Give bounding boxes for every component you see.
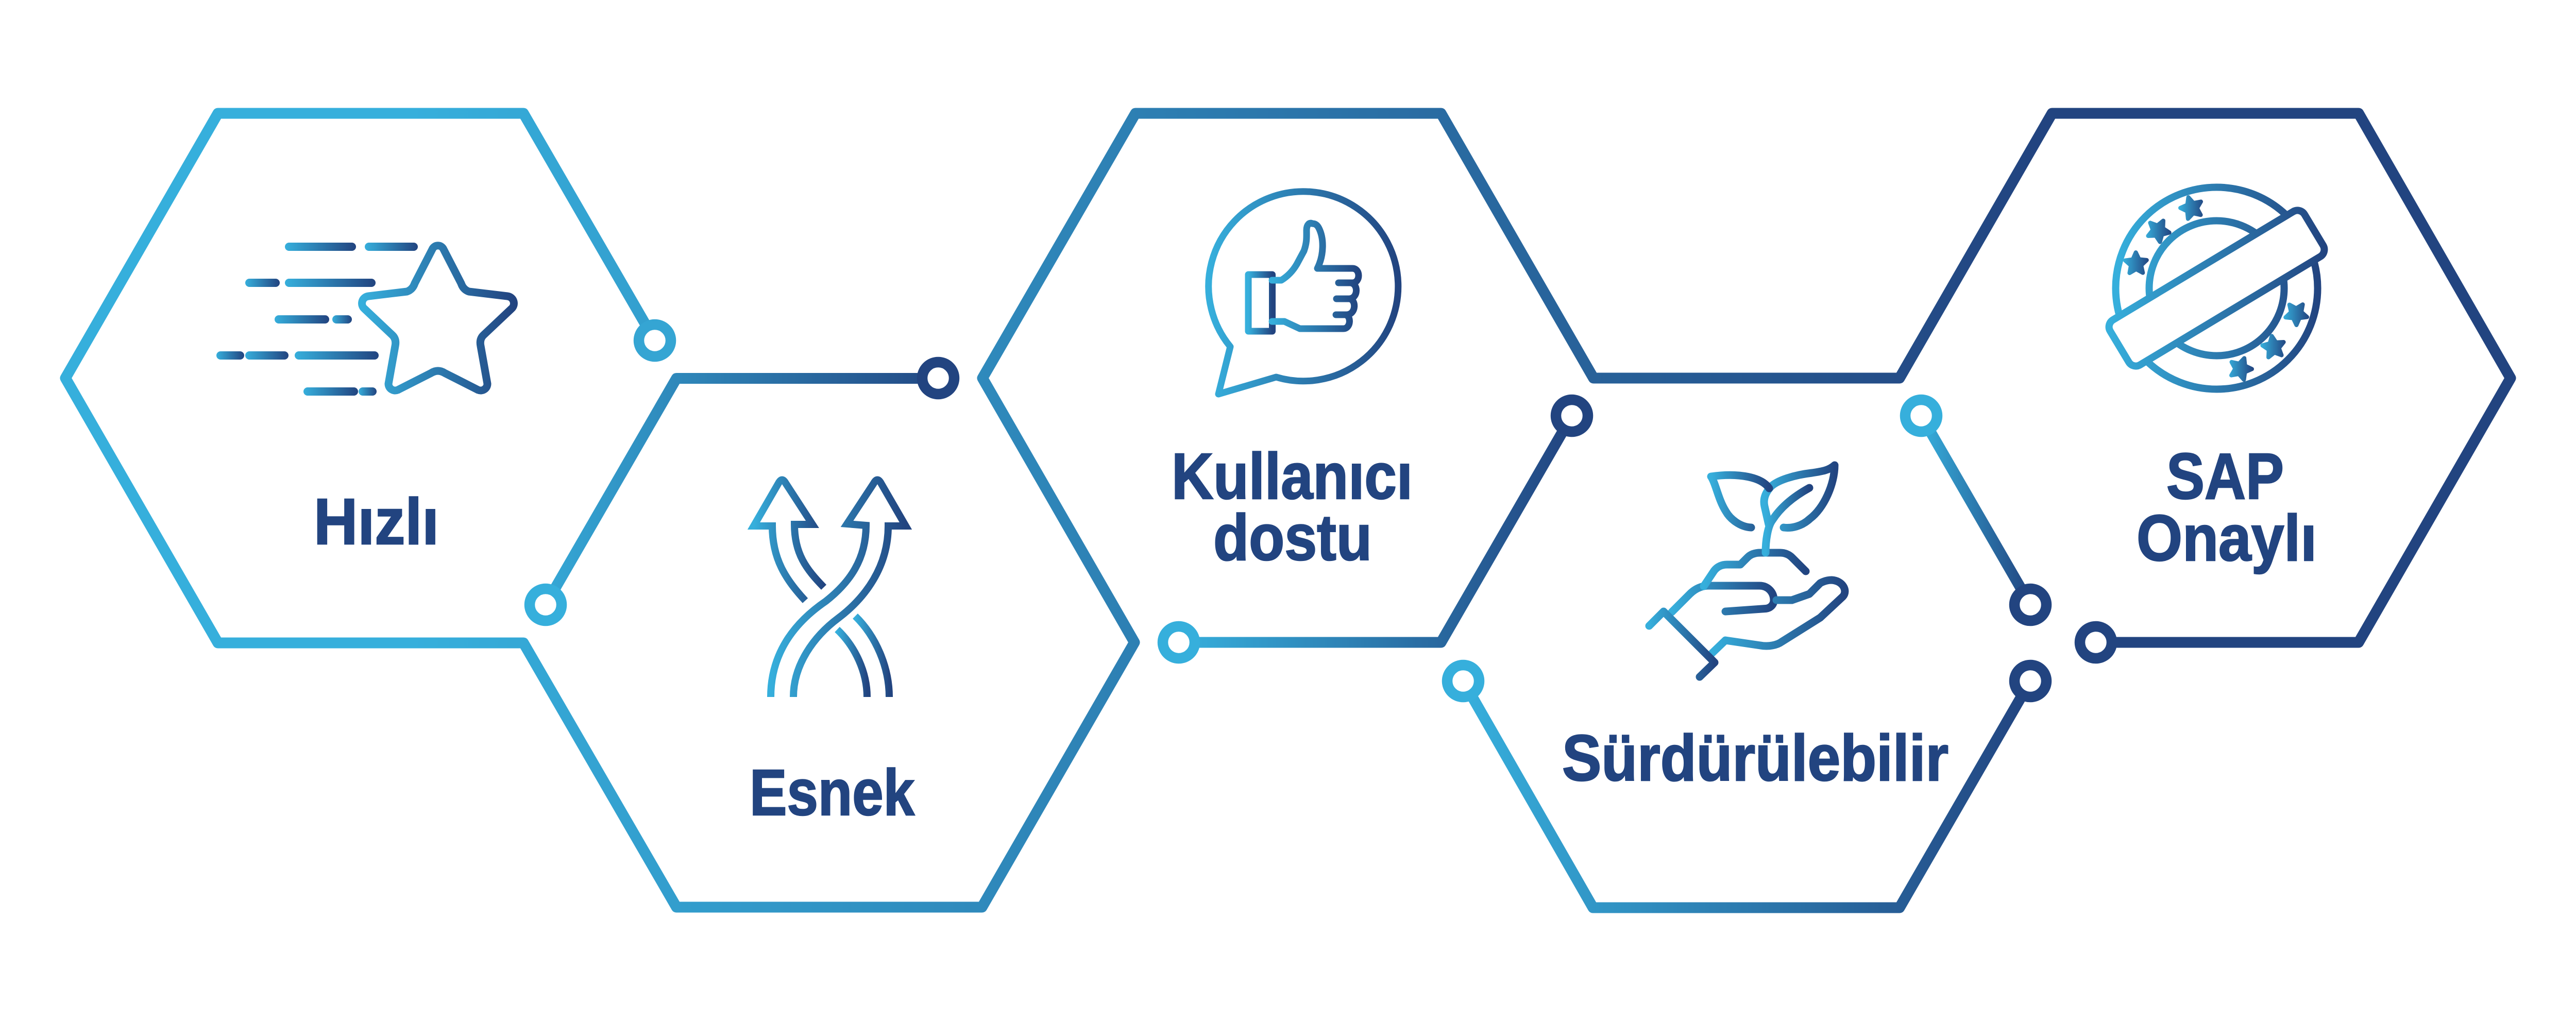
connector: Hızlı to Esnek top <box>530 362 954 621</box>
panel: Esnek <box>750 480 915 829</box>
heading: Kullanıcı dostu: Kullanıcı <box>1172 440 1413 513</box>
heading: SAP Onaylı: Onaylı <box>2137 502 2317 574</box>
heading: Kullanıcı dostu: dostu <box>1213 501 1372 574</box>
main continuous hexagon outline <box>65 113 2511 907</box>
heading: SAP Onaylı: SAP <box>2166 440 2284 513</box>
icon: crossing arrows <box>754 480 906 697</box>
heading: Sürdürülebilir: Sürdürülebilir <box>1562 722 1948 794</box>
connector: Sürdürülebilir bottom <box>1447 665 2046 908</box>
heading: SAP Onaylı <box>2137 440 2317 574</box>
panel: Kullanıcı dostu <box>1172 192 1413 574</box>
icon: speeding star <box>216 243 514 396</box>
connector: Sürdürülebilir upper right <box>1905 400 2046 621</box>
panel: SAP Onaylı <box>2106 188 2327 574</box>
heading: Esnek: Esnek <box>750 756 915 829</box>
heading: Hızlı: Hızlı <box>314 485 439 558</box>
connector: Kullanıcı dostu bottom <box>1163 400 1588 658</box>
icon: certification stamp <box>2106 188 2327 389</box>
hexagon network outlines <box>65 113 2511 908</box>
icon: hand holding plant <box>1649 465 1845 677</box>
panel: Sürdürülebilir <box>1562 465 1948 794</box>
icon: thumbs up speech bubble <box>1209 192 1398 394</box>
panel: Hızlı <box>216 243 514 558</box>
heading: Kullanıcı dostu <box>1172 440 1413 574</box>
